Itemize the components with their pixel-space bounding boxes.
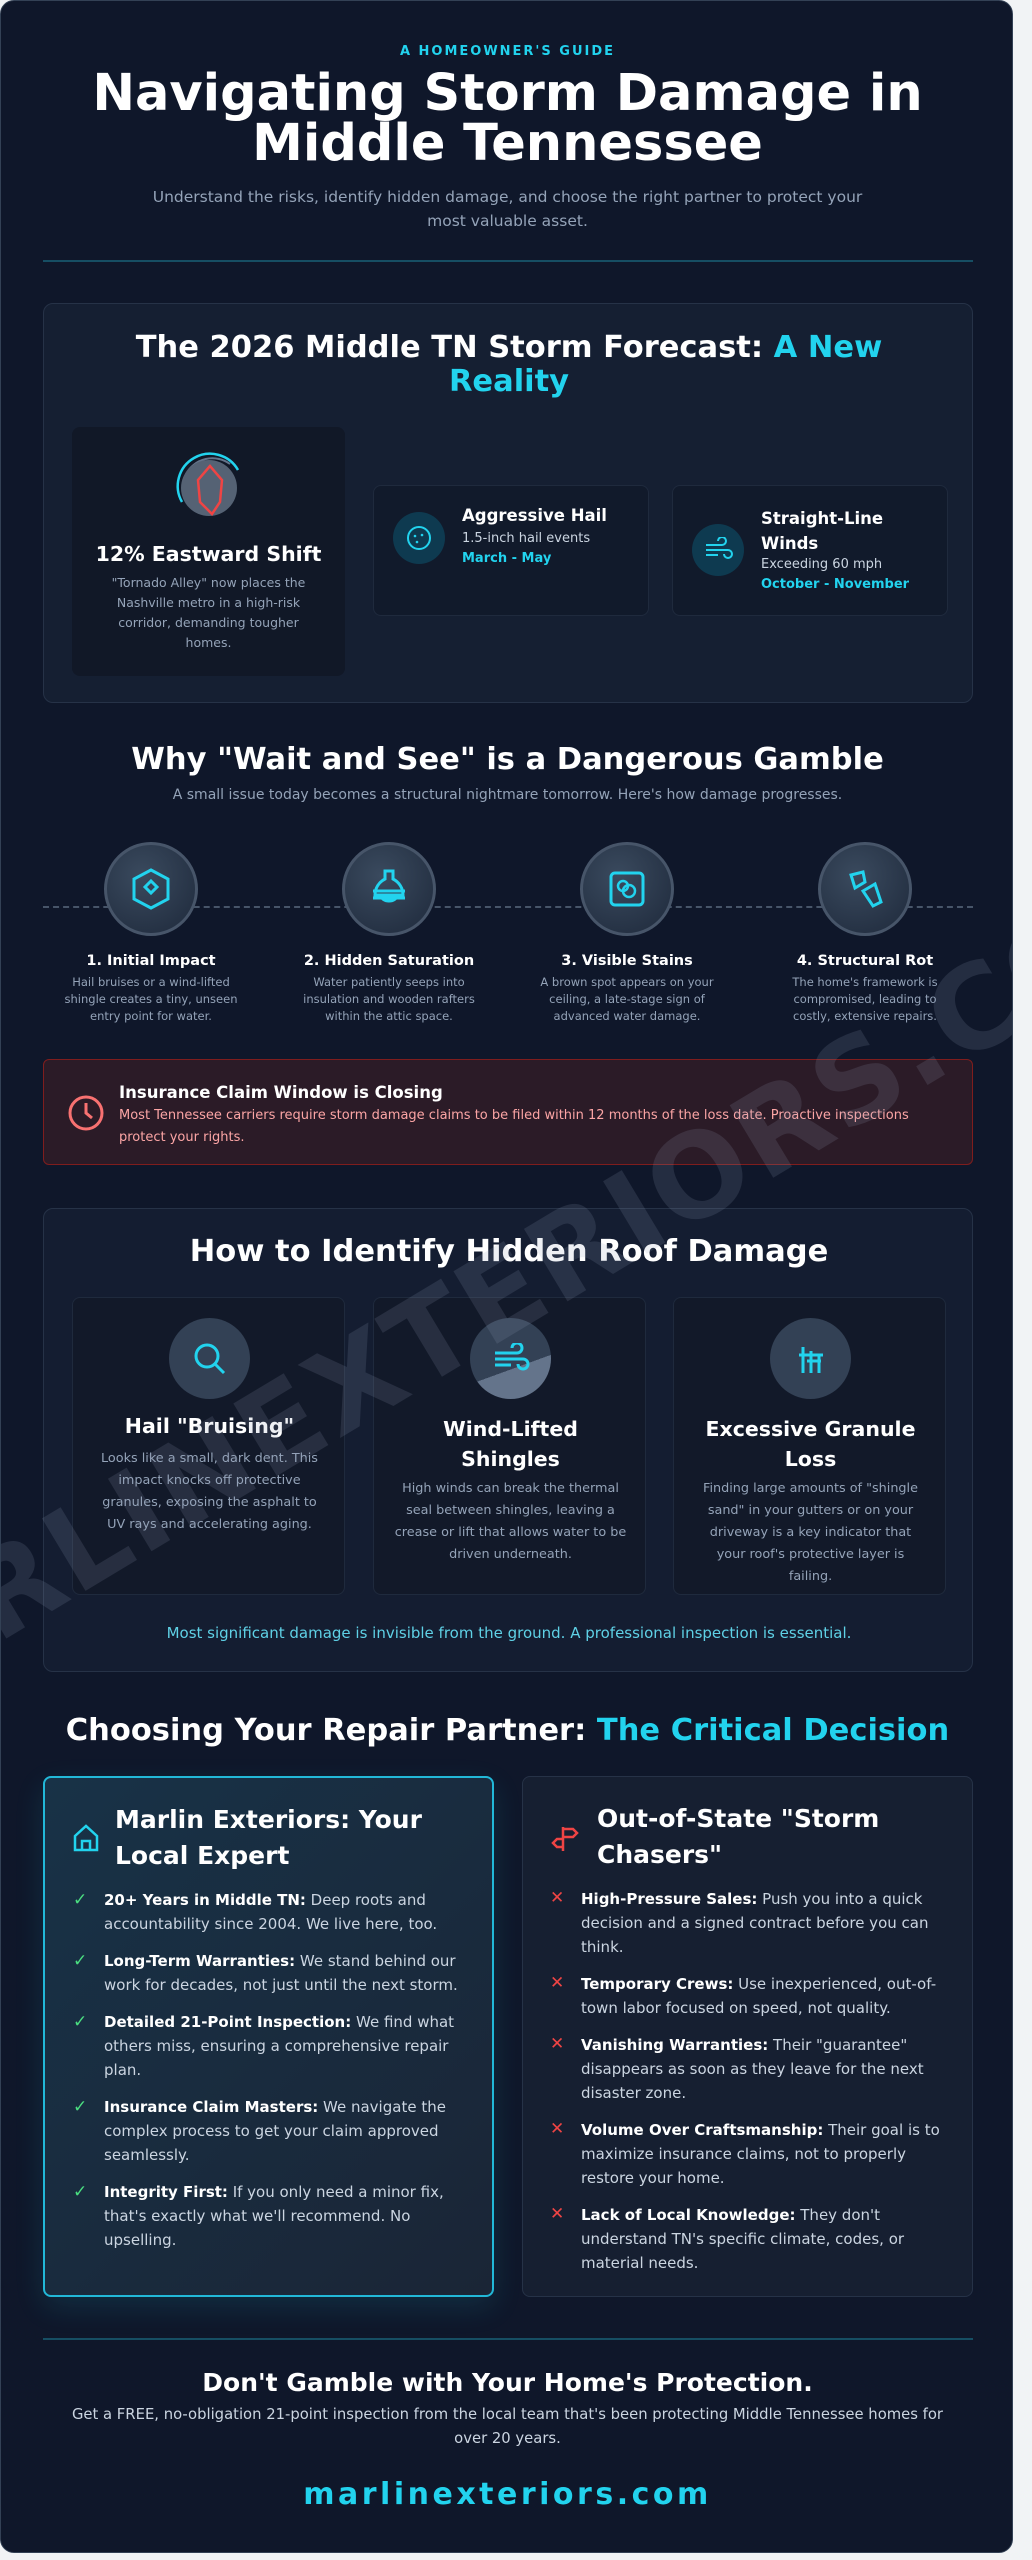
callout: insurance window: Insurance Claim Window is Closing — [119, 1083, 443, 1102]
heading: repair partner: Choosing Your Repair Partner: The Critical Decision — [66, 1713, 949, 1748]
panel: storm chasers: ✕ — [550, 1973, 564, 1993]
panel: marlin exteriors — [43, 1776, 494, 2297]
card: hail bruising: Looks like a small, dark dent. This impact knocks off protective granules, exposing the asphalt to UV rays and accelerating aging. — [101, 1451, 318, 1532]
panel: storm forecast — [43, 303, 973, 703]
panel: marlin exteriors: Local Expert — [115, 1841, 289, 1870]
panel: marlin exteriors: ✓ — [73, 2182, 87, 2202]
step 4: The home's framework is compromised, leading to costly, extensive repairs. — [792, 975, 938, 1023]
card: granule loss: Loss — [785, 1447, 836, 1471]
heading: forecast — [136, 330, 882, 399]
step 3: 3. Visible Stains — [561, 953, 693, 969]
step 3: A brown spot appears on your ceiling, a late-stage sign of advanced water damage. — [540, 975, 714, 1023]
panel: storm chasers: Chasers" — [597, 1840, 722, 1869]
heading: How to Identify Hidden Roof Damage — [190, 1234, 828, 1269]
panel: storm chasers: Lack of Local Knowledge: They don't understand TN's specific climate, codes, or material needs. — [581, 2206, 904, 2272]
heading: wait and see: Why "Wait and See" is a Dangerous Gamble — [131, 742, 884, 777]
card: hail bruising — [72, 1297, 345, 1595]
CTA text: Get a FREE, no-obligation 21-point inspection from the local team that's been protecting Middle Tennessee homes for over 20 years. — [72, 2406, 943, 2447]
card: wind-lifted: High winds can break the thermal seal between shingles, leaving a crease or lift that allows water to be driven underneath. — [395, 1481, 626, 1562]
icon: hail — [393, 512, 445, 564]
step 3 — [540, 842, 714, 1023]
panel: storm chasers: Volume Over Craftsmanship: Their goal is to maximize insurance claims, not to properly restore your home. — [581, 2121, 940, 2187]
panel: marlin exteriors: 20+ Years in Middle TN: Deep roots and accountability since 2004. We live here, too. — [104, 1891, 437, 1933]
step 2: 2. Hidden Saturation — [304, 953, 474, 969]
card: hail — [373, 485, 649, 616]
panel: storm chasers: ✕ — [550, 2119, 564, 2139]
card: winds: Straight-Line — [761, 509, 883, 528]
step 2: Water patiently seeps into insulation and wooden rafters within the attic space. — [303, 975, 475, 1023]
card: wind-lifted — [373, 1297, 646, 1595]
title — [92, 64, 923, 173]
subtitle: Understand the risks, identify hidden damage, and choose the right partner to protect your most valuable asset. — [153, 188, 862, 230]
panel: marlin exteriors: ✓ — [73, 2012, 87, 2032]
panel: storm chasers: ✕ — [550, 1888, 564, 1908]
card: winds: Winds — [761, 534, 818, 553]
heading: forecast: Reality — [449, 364, 569, 399]
card: winds: Exceeding 60 mph — [761, 557, 882, 572]
stat: 12% Eastward Shift — [96, 542, 321, 566]
icon: wind — [692, 524, 744, 576]
card: winds — [672, 485, 948, 616]
panel: identify hidden damage — [43, 1208, 973, 1672]
panel: marlin exteriors: ✓ — [73, 1890, 87, 1910]
step 1: 1. Initial Impact — [86, 953, 216, 969]
step 1: Hail bruises or a wind-lifted shingle creates a tiny, unseen entry point for water. — [65, 975, 237, 1023]
icon: house — [74, 1824, 98, 1852]
card: hail: Aggressive Hail — [462, 506, 607, 525]
card: granule loss: Finding large amounts of "shingle sand" in your gutters or on your driveway is a key indicator that your roof's protective layer is failing. — [703, 1481, 918, 1584]
step 1 — [65, 842, 237, 1023]
panel: storm chasers: Vanishing Warranties: Their "guarantee" disappears as soon as they leave for the next disaster zone. — [581, 2036, 924, 2102]
panel: marlin exteriors: Detailed 21-Point Inspection: We find what others miss, ensuring a comprehensive repair plan. — [104, 2013, 454, 2079]
heading: forecast: The 2026 Middle TN Storm Forecast: A New — [136, 330, 882, 365]
panel: marlin exteriors: Long-Term Warranties: We stand behind our work for decades, not just until the next storm. — [104, 1952, 458, 1994]
eyebrow: A HOMEOWNER'S GUIDE — [400, 44, 615, 59]
panel: marlin exteriors: Insurance Claim Masters: We navigate the complex process to get your claim approved seamlessly. — [104, 2098, 446, 2164]
icon: clock — [68, 1096, 104, 1130]
card: eastward shift — [72, 427, 345, 676]
icon: tornado map — [176, 452, 239, 516]
card: hail: 1.5-inch hail events — [462, 531, 590, 546]
step 2 — [303, 842, 475, 1023]
subheading: A small issue today becomes a structural nightmare tomorrow. Here's how damage progresses. — [173, 787, 842, 803]
URL: marlinexteriors.com — [303, 2477, 712, 2512]
timeline — [65, 842, 938, 1023]
panel: marlin exteriors: Integrity First: If you only need a minor fix, that's exactly what we'll recommend. No upselling. — [104, 2183, 444, 2249]
step 4: 4. Structural Rot — [797, 953, 933, 969]
callout: insurance window: Most Tennessee carriers require storm damage claims to be filed within 12 months of the loss date. Proactive inspections protect your rights. — [119, 1108, 909, 1145]
panel: storm chasers: Temporary Crews: Use inexperienced, out-of-town labor focused on speed, not quality. — [581, 1975, 936, 2017]
panel: storm chasers — [522, 1776, 973, 2297]
card: granule loss — [673, 1297, 946, 1595]
panel: storm chasers: ✕ — [550, 2034, 564, 2054]
icon: signpost — [551, 1827, 579, 1851]
card: hail: March - May — [462, 551, 551, 566]
panel: marlin exteriors: ✓ — [73, 2097, 87, 2117]
panel: marlin exteriors: ✓ — [73, 1951, 87, 1971]
desc: "Tornado Alley" now places the Nashville metro in a high-risk corridor, demanding tougher homes. — [112, 575, 305, 650]
panel: storm chasers: Out-of-State "Storm — [597, 1804, 879, 1833]
card: hail bruising: Hail "Bruising" — [125, 1414, 294, 1438]
panel: storm chasers: High-Pressure Sales: Push you into a quick decision and a signed contract before you can think. — [581, 1890, 928, 1956]
panel: marlin exteriors: Marlin Exteriors: Your — [115, 1805, 422, 1834]
step 4 — [792, 842, 938, 1023]
title: Middle Tennessee — [252, 114, 763, 173]
card: granule loss: Excessive Granule — [705, 1417, 916, 1441]
CTA heading: Don't Gamble with Your Home's Protection. — [202, 2368, 813, 2397]
card: wind-lifted: Shingles — [461, 1447, 560, 1471]
title: Navigating Storm Damage in — [92, 64, 923, 123]
panel: storm chasers: ✕ — [550, 2204, 564, 2224]
callout: insurance window — [43, 1059, 973, 1165]
card: winds: October - November — [761, 577, 909, 592]
note: Most significant damage is invisible from the ground. A professional inspection is essential. — [167, 1624, 851, 1642]
card: wind-lifted: Wind-Lifted — [443, 1417, 578, 1441]
